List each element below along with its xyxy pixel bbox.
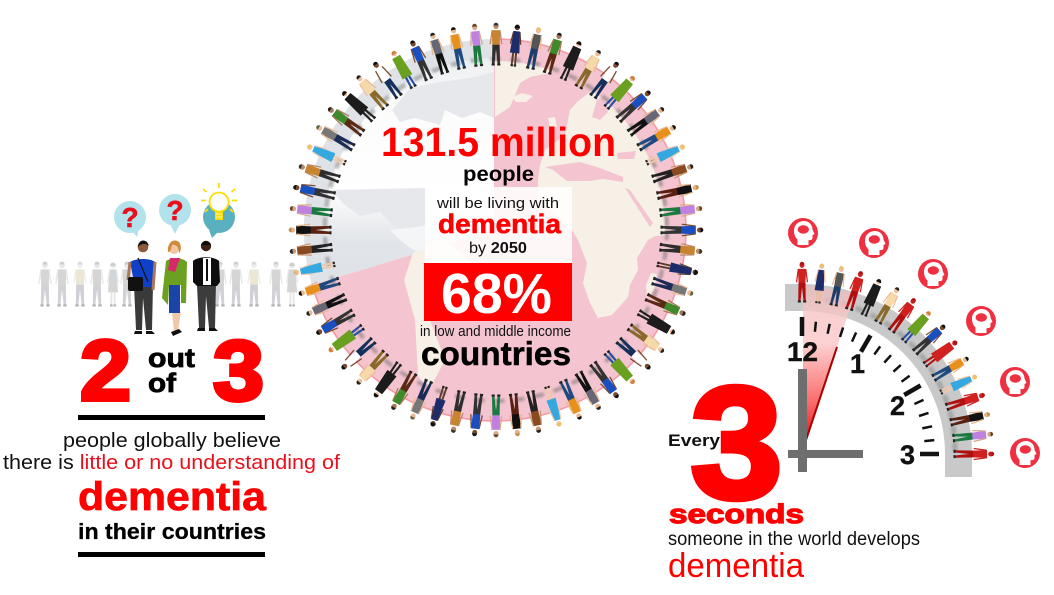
red statistic box bbox=[424, 263, 572, 321]
Red sea bbox=[625, 188, 653, 227]
translucent white text box bbox=[425, 187, 572, 263]
text: in low and middle income: in low and middle income bbox=[420, 324, 571, 340]
pink sector of pie bbox=[312, 39, 686, 421]
text: countries: countries bbox=[421, 335, 571, 372]
statistic: 68%: 68% bbox=[441, 262, 552, 326]
people on clock band bbox=[797, 262, 994, 459]
text: in their countries: in their countries bbox=[78, 519, 266, 544]
faded crowd row bbox=[39, 262, 297, 307]
text: out: out bbox=[148, 343, 195, 373]
gray sector of pie bbox=[304, 39, 494, 285]
label: people: people bbox=[463, 163, 534, 186]
Baltic sea bbox=[592, 98, 608, 120]
brain icons bbox=[788, 218, 1040, 468]
world map: beige land in pink sector bbox=[404, 61, 665, 386]
big number 3: 3 bbox=[213, 324, 264, 419]
text: Every: Every bbox=[668, 431, 721, 450]
United States bbox=[330, 188, 425, 220]
text: by 2050: by 2050 bbox=[469, 240, 527, 257]
South America bbox=[404, 250, 444, 386]
panel: every 3 seconds clock bbox=[668, 218, 1040, 585]
text: people globally believe: people globally believe bbox=[63, 430, 281, 452]
speech bubble: question mark 1: ? bbox=[121, 202, 139, 233]
top rule bbox=[78, 415, 265, 420]
speech bubble: light bulb idea bbox=[201, 183, 237, 238]
world map: gray land in gray sector bbox=[330, 72, 494, 252]
text: there is little or no understanding of: there is little or no understanding of bbox=[3, 452, 340, 474]
ring of people bbox=[289, 23, 703, 437]
foot shadows on ring bbox=[325, 59, 667, 401]
bottom rule bbox=[78, 552, 265, 557]
clock number 3: 3 bbox=[900, 440, 915, 470]
clock band shadow bbox=[825, 300, 955, 454]
clock number 2: 2 bbox=[890, 391, 905, 421]
Mexico bbox=[390, 226, 425, 252]
three second wedge bbox=[803, 285, 855, 450]
Eurasia and Africa bbox=[538, 91, 665, 318]
text: will be living with: will be living with bbox=[436, 195, 559, 212]
text: dementia: dementia bbox=[438, 209, 562, 239]
Mediterranean sea bbox=[545, 162, 623, 182]
clock hands bbox=[788, 369, 863, 472]
panel: 2 out of 3 understanding bbox=[3, 183, 340, 557]
speech bubble: question mark 2 bbox=[159, 194, 191, 234]
person: man in black jacket bbox=[193, 241, 220, 331]
text: dementia: dementia bbox=[668, 547, 804, 585]
speech bubble: question mark 2: ? bbox=[166, 195, 184, 226]
text: seconds: seconds bbox=[669, 499, 804, 529]
wedge edge bbox=[805, 347, 837, 443]
big number 3: 3 bbox=[690, 353, 783, 532]
big number 2: 2 bbox=[80, 324, 131, 419]
Black sea bbox=[617, 151, 636, 159]
person: woman in green coat bbox=[162, 240, 187, 336]
United Kingdom bbox=[548, 117, 557, 128]
Greenland bbox=[495, 61, 553, 117]
salmon rim bbox=[312, 39, 686, 421]
text: someone in the world develops: someone in the world develops bbox=[668, 529, 920, 550]
minute ticks bbox=[802, 317, 939, 454]
gray outer band bbox=[304, 39, 494, 285]
panel: global prevalence world circle bbox=[289, 23, 723, 437]
clock number 1: 1 bbox=[850, 349, 865, 379]
Madagascar bbox=[646, 273, 657, 298]
clock band bbox=[785, 284, 972, 477]
person: man in blue with bag bbox=[128, 240, 155, 334]
text: of: of bbox=[148, 368, 177, 398]
Canada and Arctic bbox=[392, 72, 494, 125]
text: dementia: dementia bbox=[78, 475, 267, 519]
statistic: 131.5 million: 131.5 million bbox=[381, 119, 616, 165]
speech bubble: question mark 1 bbox=[114, 201, 146, 237]
clock number 12: 12 bbox=[787, 337, 818, 367]
Iceland bbox=[512, 93, 533, 102]
